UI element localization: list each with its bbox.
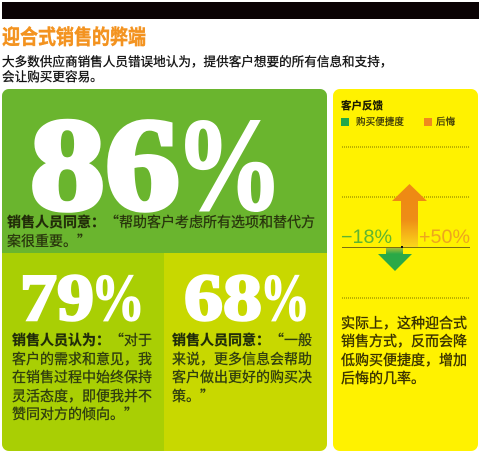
68% text: 销售人员同意：“一般来说，更多信息会帮助客户做出更好的购买决策。” [172, 330, 312, 406]
arrow: regret up [392, 184, 427, 247]
big number 68%: % [260, 261, 310, 335]
big number 79%: % [91, 261, 145, 335]
panel: customer feedback [333, 89, 478, 451]
big number 79%: 79 [20, 261, 94, 335]
big number 68%: 68 [184, 261, 262, 335]
conclusion text: 实际上，这种迎合式销售方式，反而会降低购买便捷度，增加后悔的几率。 [341, 315, 467, 386]
panel: 79% [2, 253, 164, 451]
feedback heading: 客户反馈 [341, 100, 383, 112]
legend: ease of purchase: 购买便捷度 [356, 117, 404, 128]
big number 86% [30, 91, 283, 238]
86% text: 销售人员同意：“帮助客户考虑所有选项和替代方案很重要。” [7, 212, 315, 251]
dotted grid lines [342, 147, 470, 298]
arrow: ease of purchase down [378, 248, 412, 271]
value -18%: −18% [341, 226, 392, 248]
big number 68% [184, 261, 310, 335]
panel: 68% [164, 253, 327, 451]
chart baseline [342, 246, 470, 248]
79% text: 销售人员认为：“对于客户的需求和意见，我在销售过程中始终保持灵活态度，即便我并不赞同对方的倾向。” [12, 330, 152, 424]
big number 86%: 86 [30, 91, 180, 238]
marker dot [401, 246, 403, 248]
panel: 86% [2, 89, 327, 253]
top black bar [2, 2, 479, 19]
title: 迎合式销售的弊端 [2, 26, 146, 48]
intro text: 大多数供应商销售人员错误地认为，提供客户想要的所有信息和支持， [2, 55, 392, 69]
legend: regret [424, 116, 455, 128]
legend: regret: 后悔 [436, 117, 455, 128]
intro text: 会让购买更容易。 [2, 70, 103, 84]
big number 79% [20, 261, 145, 335]
intro text [2, 55, 392, 84]
value +50%: +50% [419, 226, 470, 248]
big number 86%: % [175, 91, 283, 238]
